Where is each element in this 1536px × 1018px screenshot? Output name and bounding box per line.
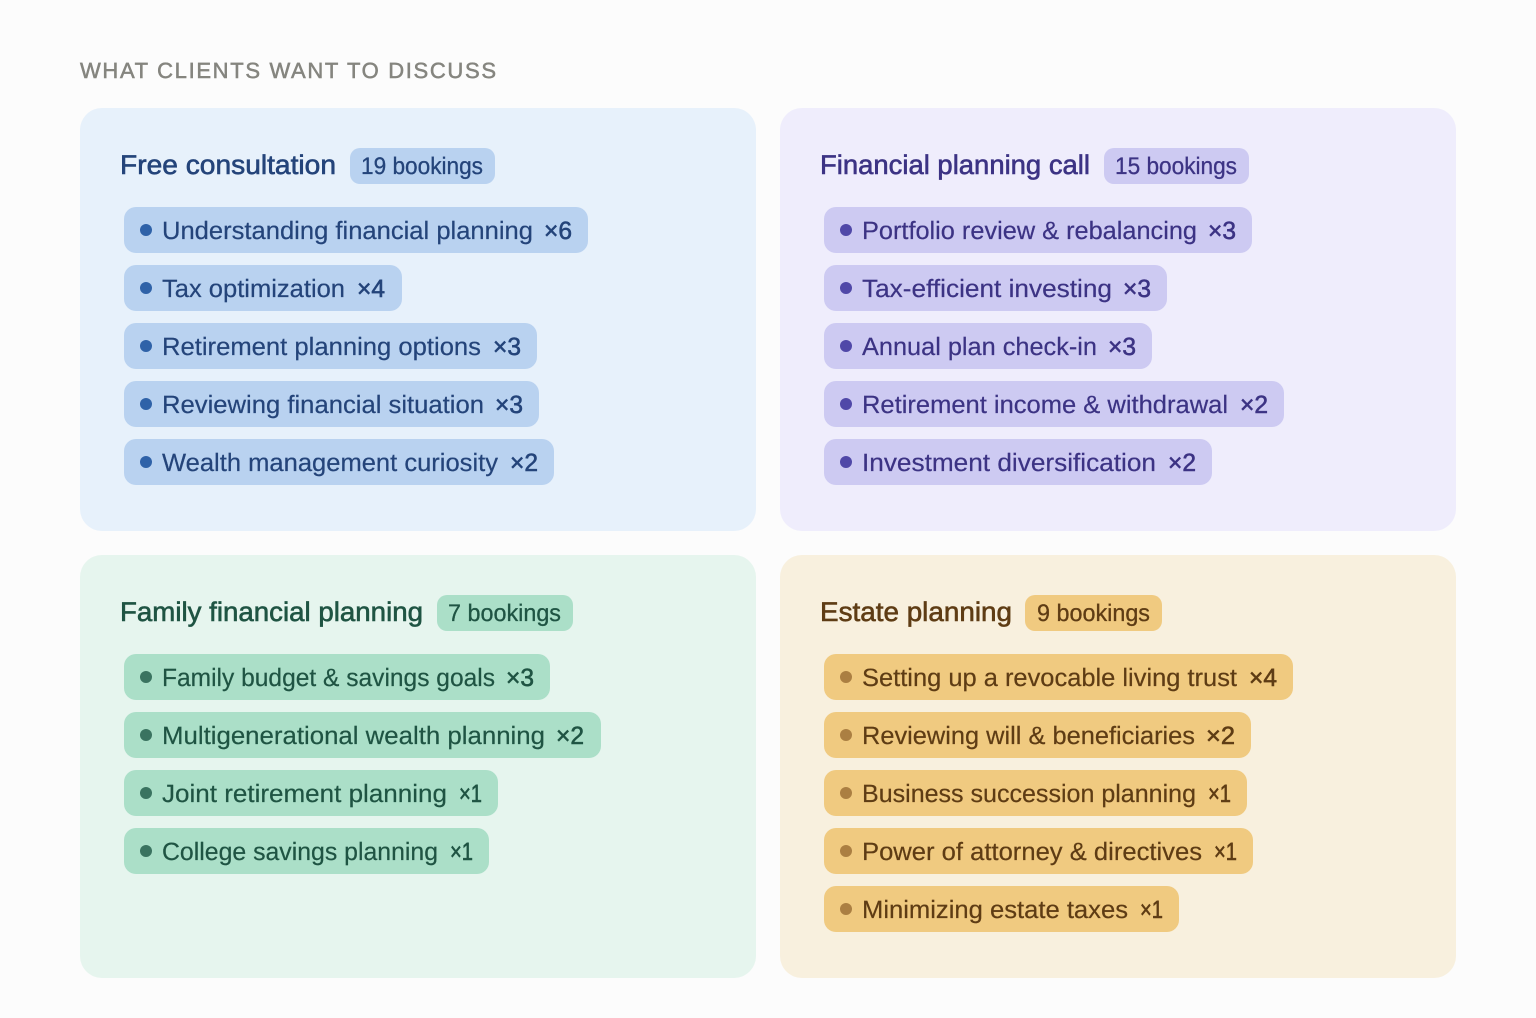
topic: annual plan check-in: ×3 <box>1108 333 1136 361</box>
topic: joint retirement planning: ×1 <box>459 780 482 808</box>
badge: 7 bookings <box>437 595 573 631</box>
topic: portfolio review and rebalancing: Portfolio review & rebalancing <box>862 217 1197 245</box>
topic: minimizing estate taxes: ×1 <box>1140 896 1163 924</box>
heading: family financial planning: Family financial planning <box>120 597 423 627</box>
topic: annual plan check-in: Annual plan check-in <box>862 333 1097 361</box>
topic: power of attorney and directives: ×1 <box>1214 838 1237 866</box>
topic: setting up a revocable living trust: ×4 <box>1249 664 1277 692</box>
topic: family budget and savings goals: ×3 <box>506 664 534 692</box>
heading: free consultation: Free consultation <box>120 150 336 180</box>
topic: investment diversification <box>824 439 1212 485</box>
topic: minimizing estate taxes <box>824 886 1179 932</box>
topic: wealth management curiosity <box>124 439 554 485</box>
topic: college savings planning: College savings planning <box>162 838 438 866</box>
topic: reviewing financial situation: Reviewing financial situation <box>162 391 484 419</box>
badge: 7 bookings: 7 bookings <box>448 600 561 627</box>
topic: business succession planning: Business succession planning <box>862 780 1196 808</box>
topic: tax optimization: Tax optimization <box>162 275 345 303</box>
topic: retirement income and withdrawal: Retirement income & withdrawal <box>862 391 1228 419</box>
topic: college savings planning: ×1 <box>450 838 473 866</box>
topic: setting up a revocable living trust: Setting up a revocable living trust <box>862 664 1237 692</box>
topic: family budget and savings goals: Family budget & savings goals <box>162 664 495 692</box>
badge: 19 bookings <box>350 148 495 184</box>
topic: multigenerational wealth planning <box>124 712 601 758</box>
topic: understanding financial planning: ×6 <box>544 217 572 245</box>
panel: estate planning <box>780 555 1456 978</box>
topic: power of attorney and directives: Power of attorney & directives <box>862 838 1202 866</box>
topic: minimizing estate taxes: Minimizing estate taxes <box>862 896 1128 924</box>
topic: tax optimization: ×4 <box>357 275 385 303</box>
topic: retirement planning options: Retirement planning options <box>162 333 481 361</box>
topic: investment diversification: Investment diversification <box>862 449 1156 477</box>
topic: reviewing will and beneficiaries: ×2 <box>1206 722 1235 750</box>
topic: reviewing financial situation: ×3 <box>495 391 523 419</box>
badge: 9 bookings <box>1025 595 1162 631</box>
topic: portfolio review and rebalancing <box>824 207 1252 253</box>
topic: reviewing financial situation <box>124 381 539 427</box>
badge: 15 bookings <box>1104 148 1249 184</box>
badge: 19 bookings: 19 bookings <box>361 153 483 180</box>
topic: joint retirement planning: Joint retirement planning <box>162 780 447 808</box>
badge: 15 bookings: 15 bookings <box>1115 153 1237 180</box>
topic: retirement planning options: ×3 <box>493 333 521 361</box>
topic: tax-efficient investing: Tax-efficient investing <box>862 275 1112 303</box>
topic: tax-efficient investing <box>824 265 1167 311</box>
topic: business succession planning: ×1 <box>1208 780 1231 808</box>
topic: tax optimization <box>124 265 402 311</box>
topic: reviewing will and beneficiaries <box>824 712 1251 758</box>
topic: multigenerational wealth planning: Multigenerational wealth planning <box>162 722 545 750</box>
topic: multigenerational wealth planning: ×2 <box>556 722 584 750</box>
panel: family financial planning <box>80 555 756 978</box>
topic: wealth management curiosity: ×2 <box>510 449 538 477</box>
topic: business succession planning <box>824 770 1247 816</box>
topic: joint retirement planning <box>124 770 498 816</box>
topic: retirement planning options <box>124 323 537 369</box>
topic: annual plan check-in <box>824 323 1152 369</box>
topic: college savings planning <box>124 828 489 874</box>
panel: free consultation <box>80 108 756 531</box>
panel: financial planning call <box>780 108 1456 531</box>
title: WHAT CLIENTS WANT TO DISCUSS <box>80 58 496 83</box>
topic: setting up a revocable living trust <box>824 654 1293 700</box>
topic: understanding financial planning <box>124 207 588 253</box>
topic: tax-efficient investing: ×3 <box>1123 275 1151 303</box>
topic: understanding financial planning: Understanding financial planning <box>162 217 533 245</box>
topic: family budget and savings goals <box>124 654 550 700</box>
topic: wealth management curiosity: Wealth management curiosity <box>162 449 499 477</box>
topic: reviewing will and beneficiaries: Reviewing will & beneficiaries <box>862 722 1195 750</box>
topic: retirement income and withdrawal: ×2 <box>1240 391 1268 419</box>
topic: portfolio review and rebalancing: ×3 <box>1208 217 1236 245</box>
badge: 9 bookings: 9 bookings <box>1037 600 1150 627</box>
topic: investment diversification: ×2 <box>1168 449 1196 477</box>
heading: financial planning call: Financial planning call <box>820 150 1090 180</box>
topic: power of attorney and directives <box>824 828 1253 874</box>
topic: retirement income and withdrawal <box>824 381 1284 427</box>
heading: estate planning: Estate planning <box>820 597 1012 627</box>
